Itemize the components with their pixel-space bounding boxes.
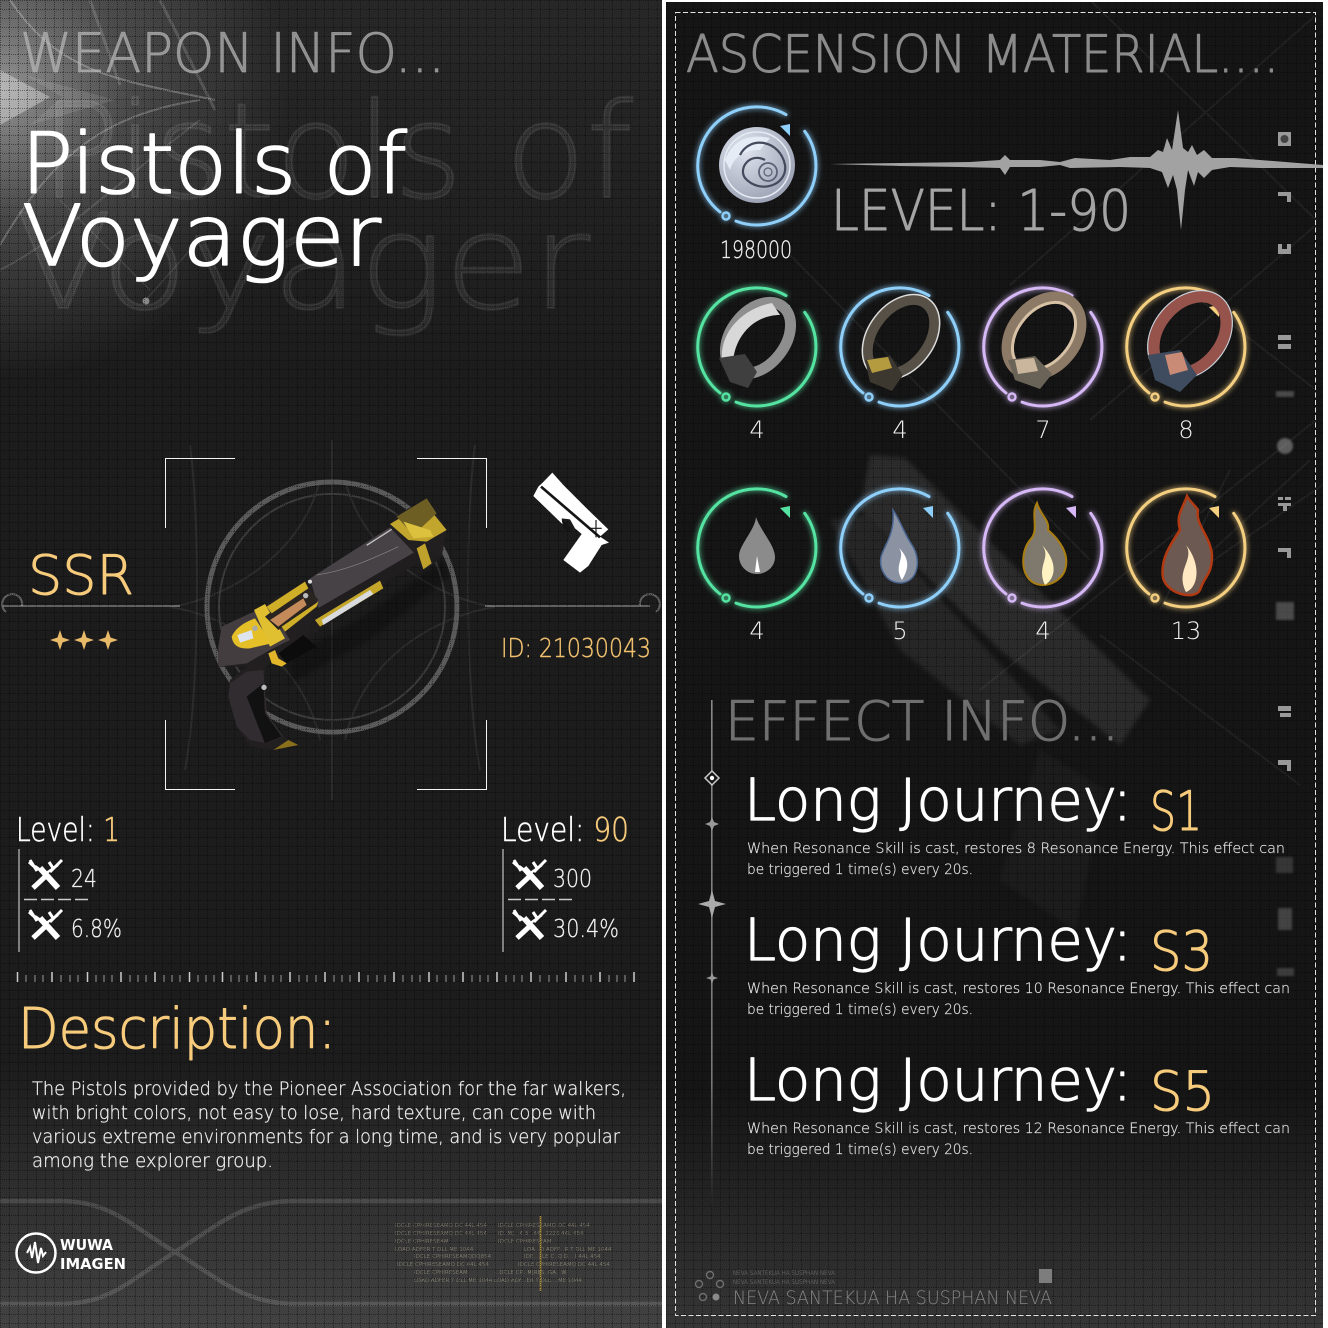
ruler <box>18 972 634 982</box>
data readout: IDCLE CPHIRESEAMQ DC 44L 454 <box>397 1262 489 1268</box>
stats: level 90 <box>501 810 629 952</box>
description text: various extreme environments for a long time, and is very popular <box>32 1126 620 1148</box>
effect: S5: Long Journey: <box>744 1046 1132 1114</box>
material: ring tier 3: 7 <box>1035 416 1051 444</box>
logo: WUWA <box>60 1236 113 1254</box>
material: flame tier 1: 4 <box>749 617 765 645</box>
data readout: LOAD ADF...ER T DLL....ME 1044 <box>494 1278 582 1284</box>
ghost pistol silhouette <box>830 455 1150 930</box>
panel: weapon info <box>0 0 662 1328</box>
timeline <box>698 700 726 1210</box>
top-left light burst <box>0 0 400 420</box>
material: flame tier 1 <box>698 489 816 645</box>
data readout: ...DCLE CP...M|RES..GA...W <box>494 1270 567 1276</box>
effect: S5: When Resonance Skill is cast, restores 12 Resonance Energy. This effect can <box>747 1121 1290 1137</box>
material: ring tier 1 <box>698 288 816 444</box>
heading: weapon info: WEAPON INFO... <box>20 22 445 85</box>
material: ring tier 1: 4 <box>749 416 765 444</box>
material: shell credit: 198000 <box>720 236 792 264</box>
material: flame tier 4 <box>1127 489 1245 645</box>
stats: level 1: Level: 1 <box>16 810 120 849</box>
panel: ascension and effect <box>666 0 1328 1328</box>
ghost title: Pistols of <box>40 75 634 229</box>
rarity: SSR: SSR <box>28 544 134 607</box>
level range: LEVEL: 1-90 <box>831 179 1131 244</box>
data readout: IDCLE CPHIRESEAM <box>414 1270 468 1276</box>
data readout: IDCLE CPHIRESEAMQ DC 44L 454 <box>498 1223 590 1229</box>
footer script text: NEVA SANTEKUA HA SUSPHAN NEVA <box>733 1269 835 1277</box>
material: flame tier 2 <box>841 489 959 645</box>
material: ring tier 4 <box>1127 274 1250 444</box>
stats: level 1: 24 <box>71 864 97 893</box>
data readout <box>395 1223 612 1284</box>
logo <box>16 1234 126 1273</box>
weapon: pistol <box>218 498 450 750</box>
effect: S1: Long Journey: <box>744 766 1132 834</box>
title: Pistols of <box>21 115 407 213</box>
material: flame tier 4: 13 <box>1171 617 1201 645</box>
title <box>21 115 407 285</box>
stats: level 1 <box>16 810 122 952</box>
effect: S1: When Resonance Skill is cast, restores 8 Resonance Energy. This effect can <box>747 841 1285 857</box>
heading: description: Description: <box>18 997 336 1062</box>
background linework <box>790 0 1328 785</box>
title: Voyager <box>22 187 381 285</box>
data readout: LOA...D ADFF...R T DLL ME 1044 <box>524 1247 612 1253</box>
side glyph column <box>1276 132 1294 976</box>
material: ring tier 3 <box>984 283 1102 444</box>
footer crossing curves <box>0 1201 662 1304</box>
waveform <box>830 110 1323 230</box>
description text <box>32 1078 626 1172</box>
description text: with bright colors, not easy to lose, hard texture, can cope with <box>32 1102 596 1124</box>
material: flame tier 3 <box>984 489 1102 645</box>
frame brackets <box>166 458 486 790</box>
data readout: IDCLE CPHIRESEAMQDQ854 <box>414 1254 492 1260</box>
material: ring tier 4: 8 <box>1178 416 1194 444</box>
weapon id: ID: 21030043 <box>501 634 651 664</box>
data readout: IDCLE CPHIRESEAMQ DC 44L 454 <box>395 1223 487 1229</box>
effect: S3 <box>744 906 1290 1018</box>
material: ring tier 2: 4 <box>892 416 908 444</box>
effect: S1: be triggered 1 time(s) every 20s. <box>747 862 973 878</box>
footer script text <box>733 1269 1052 1309</box>
material: ring tier 2 <box>841 280 959 444</box>
dashed frame <box>676 12 1316 1316</box>
heading: ascension material: ASCENSION MATERIAL.... <box>686 25 1279 85</box>
data readout: IDE.....LE C..Q D....I 44L 454 <box>524 1254 601 1260</box>
data readout: ID..M|...4 3...44...2223 44L 454 <box>498 1231 584 1237</box>
stats: level 1: 6.8% <box>71 914 122 943</box>
description text: among the explorer group. <box>32 1150 273 1172</box>
effect: S1 <box>744 766 1285 878</box>
icon: pistol type <box>533 473 609 573</box>
effect: S5 <box>744 1046 1290 1158</box>
footer dot cluster <box>696 1272 724 1300</box>
data readout: IDCLE CPHIRESEAM <box>395 1239 449 1245</box>
data readout: IDCLE CPHIRESEAMQ DC 44L 454 <box>395 1231 487 1237</box>
material: flame tier 2: 5 <box>892 617 908 645</box>
data readout: LOAD ADFER T DLL ME 1044 <box>414 1278 493 1284</box>
effect: S3: Long Journey: <box>744 906 1132 974</box>
data readout: LOAD ADFER T DLL ME 1044 <box>395 1247 474 1253</box>
stats: level 90: 300 <box>553 864 592 893</box>
data readout: IDCLE CPHIRESEAMQ DC 44L 454 <box>518 1262 610 1268</box>
ornament behind weapon <box>2 440 660 800</box>
ghost title: Voyager <box>15 186 591 340</box>
data readout: IDCLE CPHIRESEAM <box>498 1239 552 1245</box>
effect: S5: be triggered 1 time(s) every 20s. <box>747 1142 973 1158</box>
effect: S3: be triggered 1 time(s) every 20s. <box>747 1002 973 1018</box>
ghost title <box>15 75 634 340</box>
heading: effect info: EFFECT INFO... <box>725 690 1119 753</box>
footer script text: NEVA SANTEKUA HA SUSPHAN NEVA <box>733 1278 835 1286</box>
effect: S3: S3 <box>1150 920 1213 983</box>
effect: S5: S5 <box>1150 1060 1215 1123</box>
description text: The Pistols provided by the Pioneer Association for the far walkers, <box>32 1078 626 1100</box>
rarity stars <box>50 630 118 650</box>
effect: S3: When Resonance Skill is cast, restores 10 Resonance Energy. This effect can <box>747 981 1290 997</box>
material: shell credit <box>698 107 816 264</box>
material: flame tier 3: 4 <box>1035 617 1051 645</box>
effect: S1: S1 <box>1150 780 1202 843</box>
stats: level 90: 30.4% <box>553 914 619 943</box>
footer script text: NEVA SANTEKUA HA SUSPHAN NEVA <box>733 1287 1052 1309</box>
footer square <box>1039 1269 1052 1283</box>
weapon ring <box>207 482 457 732</box>
logo: IMAGEN <box>60 1255 126 1273</box>
stats: level 90: Level: 90 <box>501 810 629 849</box>
